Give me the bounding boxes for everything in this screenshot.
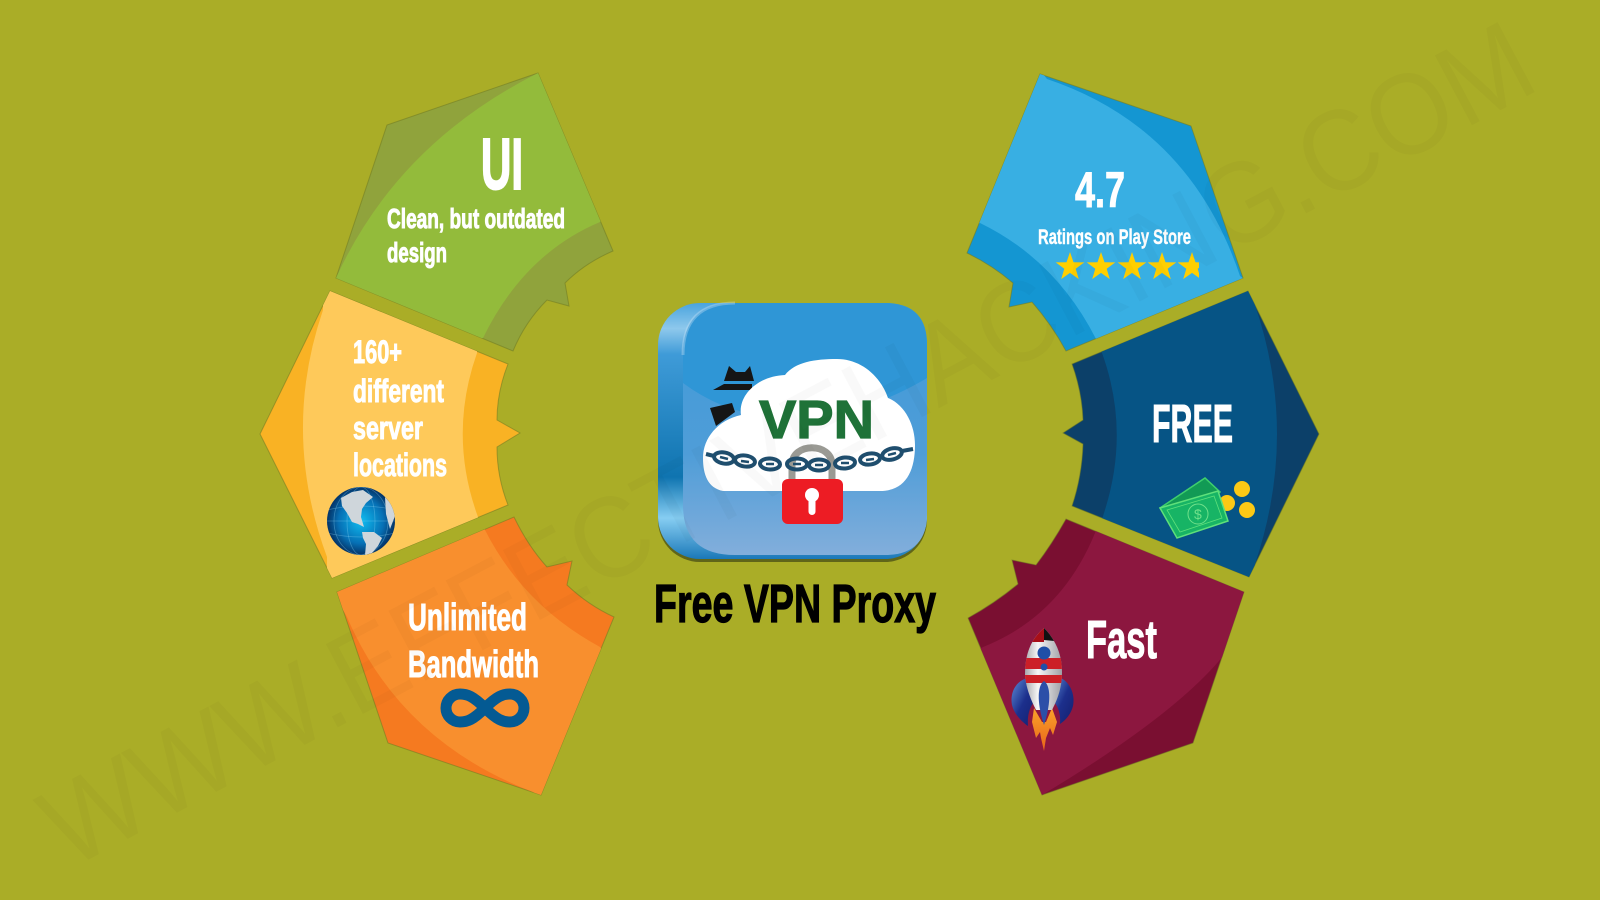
text: VPN: VPN xyxy=(759,390,874,450)
text: clean but outdated design: design xyxy=(387,237,447,268)
icon: padlock xyxy=(782,479,843,524)
text: clean but outdated design xyxy=(387,203,565,268)
icon: money and coins: $ xyxy=(1194,506,1202,522)
text: 160+ different server locations: different xyxy=(353,373,444,409)
heading: Fast: Fast xyxy=(1086,610,1157,670)
text: 160+ different server locations: 160+ xyxy=(353,334,402,370)
text: ratings on play store: Ratings on Play Store xyxy=(1038,226,1191,249)
heading: FREE: FREE xyxy=(1152,394,1233,454)
panel: server locations xyxy=(260,280,520,600)
icon: chain xyxy=(706,446,913,470)
text: 160+ different server locations: locations xyxy=(353,447,447,483)
icon: shackle xyxy=(792,448,832,480)
heading: 4.7: 4.7 xyxy=(1075,162,1125,218)
icon: stars xyxy=(1056,252,1206,279)
app icon: VPN cloud and lock xyxy=(658,303,927,562)
text: unlimited bandwidth: Unlimited xyxy=(408,597,527,639)
text: 160+ different server locations xyxy=(353,334,447,483)
heading: UI: UI xyxy=(481,125,523,205)
cloud xyxy=(703,359,915,491)
text: unlimited bandwidth xyxy=(408,597,539,686)
icon: globe xyxy=(327,487,395,555)
icon: infinity xyxy=(446,694,524,722)
title: Free VPN Proxy xyxy=(654,574,936,634)
text: unlimited bandwidth: Bandwidth xyxy=(408,644,539,686)
icon: rocket xyxy=(1012,625,1074,751)
panel: free xyxy=(1063,283,1319,590)
panel: unlimited bandwidth xyxy=(336,516,614,796)
text: clean but outdated design: Clean, but outdated xyxy=(387,203,565,234)
panel: UI xyxy=(336,72,614,352)
icon: money and coins xyxy=(1160,478,1255,538)
panel: fast xyxy=(968,518,1244,796)
text: 160+ different server locations: server xyxy=(353,410,423,446)
panel: rating xyxy=(966,74,1244,352)
icon: spy hat xyxy=(710,366,754,426)
